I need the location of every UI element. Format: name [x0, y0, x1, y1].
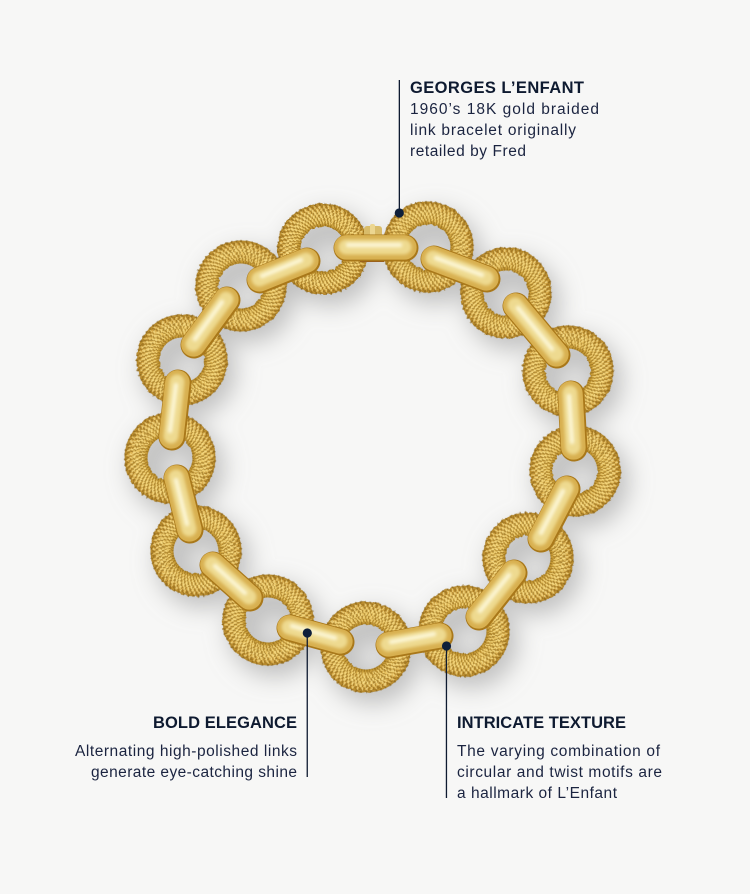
ring 2 [365, 184, 491, 310]
description: The varying combination of [457, 743, 661, 760]
polished link: bottom left [289, 626, 341, 642]
heading: INTRICATE TEXTURE [457, 714, 626, 732]
callout: Intricate Texture [442, 641, 662, 802]
description: circular and twist motifs are [457, 764, 662, 781]
polished link: left 3 [193, 299, 227, 345]
leader line and dot [303, 628, 312, 777]
ring 13 [178, 223, 304, 349]
ring 3 [454, 241, 558, 345]
ring 9 [205, 557, 331, 683]
leader line and dot [442, 641, 451, 798]
ring 7 [403, 570, 525, 692]
description: link bracelet originally [410, 122, 576, 139]
polished link: upper right [433, 258, 487, 279]
description: a hallmark of L’Enfant [457, 785, 618, 802]
polished link: left 1 [176, 477, 190, 530]
polished link: right 2 [569, 393, 574, 448]
ring 4 [507, 310, 629, 432]
description [75, 743, 297, 781]
callout: Georges L'Enfant [395, 79, 599, 218]
bracelet drop shadow [147, 227, 612, 687]
ring 12 [130, 308, 234, 412]
polished link: lower left [212, 564, 250, 598]
ring 5 [518, 414, 632, 528]
ring 10 [139, 494, 253, 608]
ring 11 [109, 397, 231, 519]
ring 8 [314, 595, 418, 699]
ring 6 [471, 501, 585, 615]
leader line and dot [395, 80, 404, 218]
polished link: left 2 [170, 382, 178, 437]
description [457, 743, 662, 802]
clasp hinge [360, 224, 384, 262]
polished link: right 1 [515, 305, 557, 355]
heading: BOLD ELEGANCE [153, 714, 297, 732]
polished link: bottom right [388, 634, 440, 645]
ring 1 [278, 204, 368, 294]
description [410, 101, 599, 160]
polished link: right 3 [540, 488, 567, 539]
description: retailed by Fred [410, 143, 526, 160]
polished link: clasp [346, 245, 405, 248]
description: Alternating high-polished links [75, 743, 297, 760]
description: 1960’s 18K gold braided [410, 101, 599, 118]
description: generate eye-catching shine [91, 764, 297, 781]
heading: GEORGES L’ENFANT [410, 79, 584, 97]
polished link: upper left [259, 260, 307, 280]
gold bracelet [109, 184, 632, 699]
callout: Bold Elegance [75, 628, 312, 781]
polished link: lower right [478, 572, 514, 617]
